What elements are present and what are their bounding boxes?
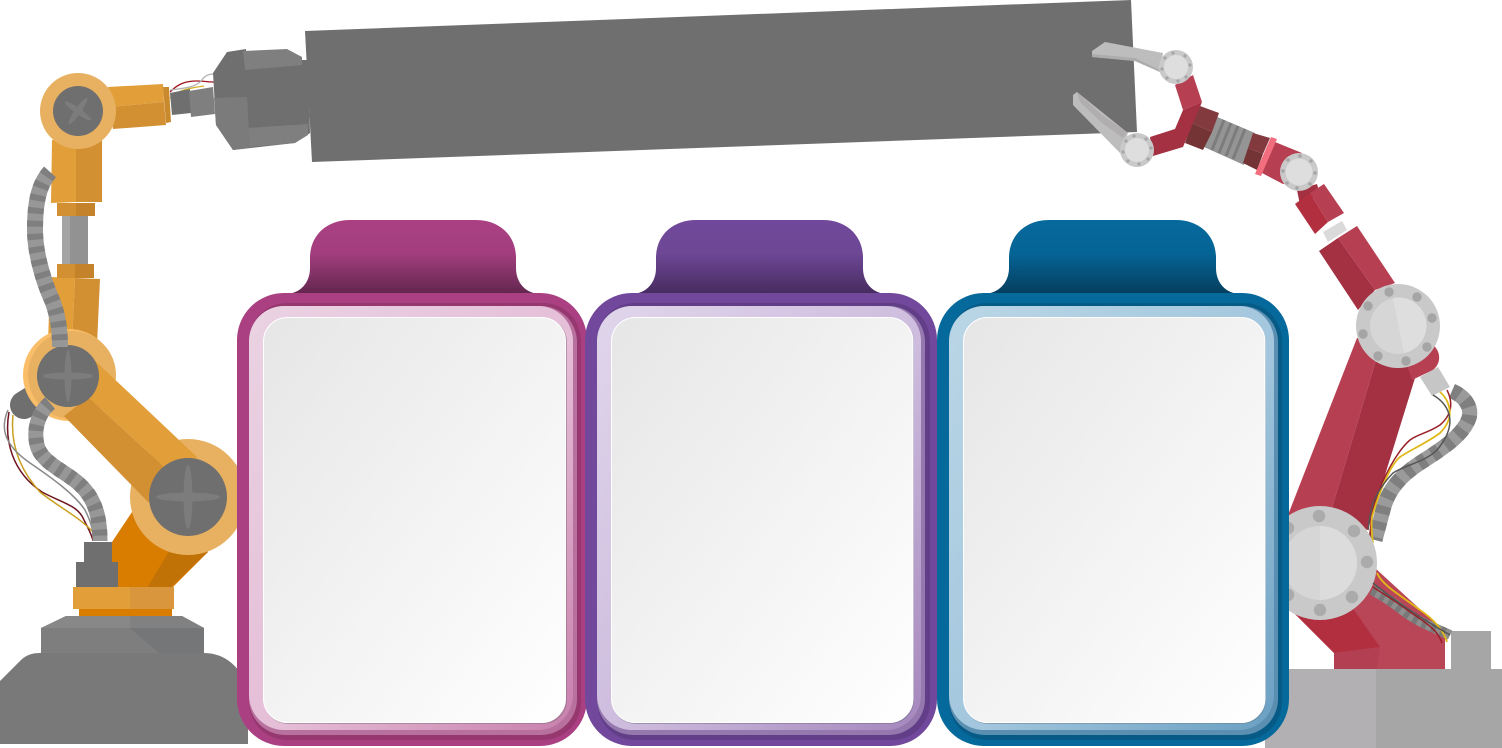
collar: dark claw block: [1185, 106, 1219, 150]
ring: darker outer band: [249, 306, 577, 735]
rod: grey connector: [62, 215, 88, 265]
red robot arm: [1073, 42, 1502, 748]
cable: rear flexible conduit: [1375, 391, 1470, 540]
joint: lower finger: [1120, 133, 1154, 167]
segment: wrist red: [1262, 142, 1302, 185]
joint: wrist: [1280, 153, 1318, 191]
segment: forearm block: [1295, 184, 1344, 234]
collars on the vertical arm: [57, 203, 95, 278]
gripper body: [213, 49, 310, 150]
segment: horizontal forearm: [108, 84, 171, 129]
connector boxes: [76, 542, 118, 587]
connector sleeve: [189, 87, 215, 117]
joint: upper finger: [1159, 50, 1193, 84]
claw arm upper: [1175, 75, 1202, 110]
panel: blue card body: [964, 318, 1265, 722]
ring: pale magenta: [249, 306, 573, 730]
tab: magenta: [285, 220, 541, 294]
segment: long diagonal arm: [64, 356, 197, 502]
joint ring: elbow: [130, 439, 246, 555]
cable: base conduit: [1372, 590, 1450, 635]
orange robot arm: [0, 73, 248, 744]
gripper lower jaw: [248, 124, 308, 147]
frame: magenta outer: [237, 293, 587, 746]
frame shadow: [249, 303, 581, 740]
cable: lower flexible conduit: [36, 403, 100, 541]
panel: magenta card body: [264, 318, 566, 722]
ring: darker outer band: [597, 306, 925, 735]
segment: lower vertical arm: [48, 277, 100, 345]
connector near elbow: [1420, 367, 1450, 396]
segment: lower base riser: [1293, 568, 1445, 669]
panel: purple card body: [612, 318, 913, 722]
card: purple: [585, 220, 937, 746]
finger: lower: [1073, 92, 1128, 153]
segment: upper vertical arm: [51, 140, 102, 203]
hub: elbow: [149, 458, 227, 536]
connector: light sleeve: [1323, 221, 1347, 242]
left wires to shoulder: [4, 410, 93, 541]
gripper upper jaw: [243, 49, 302, 70]
gripper lower left plate: [214, 97, 250, 150]
cable: upper flexible conduit: [35, 172, 60, 347]
frame shadow: [597, 303, 930, 740]
claw arm lower: [1150, 102, 1202, 156]
frame: blue outer: [937, 293, 1289, 746]
base: stepped pedestal: [41, 616, 204, 654]
card: blue: [937, 220, 1289, 746]
finger: upper: [1092, 42, 1163, 72]
frame shadow: [949, 303, 1282, 740]
joint: wrist: [40, 73, 116, 149]
wires: rear arm: [1368, 390, 1451, 543]
tab: purple: [631, 220, 888, 294]
panel shadow: [264, 318, 567, 724]
panel shadow: [612, 318, 914, 724]
band: pink: [1255, 137, 1277, 176]
ring: darker outer band: [949, 306, 1278, 735]
joint: base flange: [1263, 506, 1377, 620]
segment: upper arm: [1319, 226, 1395, 310]
banner: grey tilted board: [305, 0, 1137, 162]
joint: elbow flange: [1356, 284, 1440, 368]
base: large foot: [0, 653, 248, 744]
left gripper holding the banner: [170, 49, 310, 150]
frame: purple outer: [585, 293, 937, 746]
small grey step: [1451, 631, 1491, 669]
segment: base riser: [112, 512, 208, 590]
base: two-tone grey block: [1265, 669, 1502, 748]
panel shadow: [964, 318, 1266, 724]
ring: pale purple: [597, 306, 921, 730]
wires at the wrist: [170, 74, 214, 98]
spring: threaded connector: [1204, 116, 1255, 165]
tab: blue: [983, 220, 1241, 294]
card: magenta: [237, 220, 587, 746]
connector: [170, 89, 191, 115]
ring: pale blue: [949, 306, 1274, 730]
segment: main lower arm: [1288, 338, 1439, 530]
wires: base: [1373, 573, 1450, 643]
joint ring: shoulder: [23, 329, 116, 421]
hub: shoulder: [37, 345, 99, 407]
plate: orange turntable: [73, 587, 174, 617]
cap: grey capsule behind shoulder: [24, 392, 45, 405]
collar: dark block: [1243, 133, 1270, 170]
